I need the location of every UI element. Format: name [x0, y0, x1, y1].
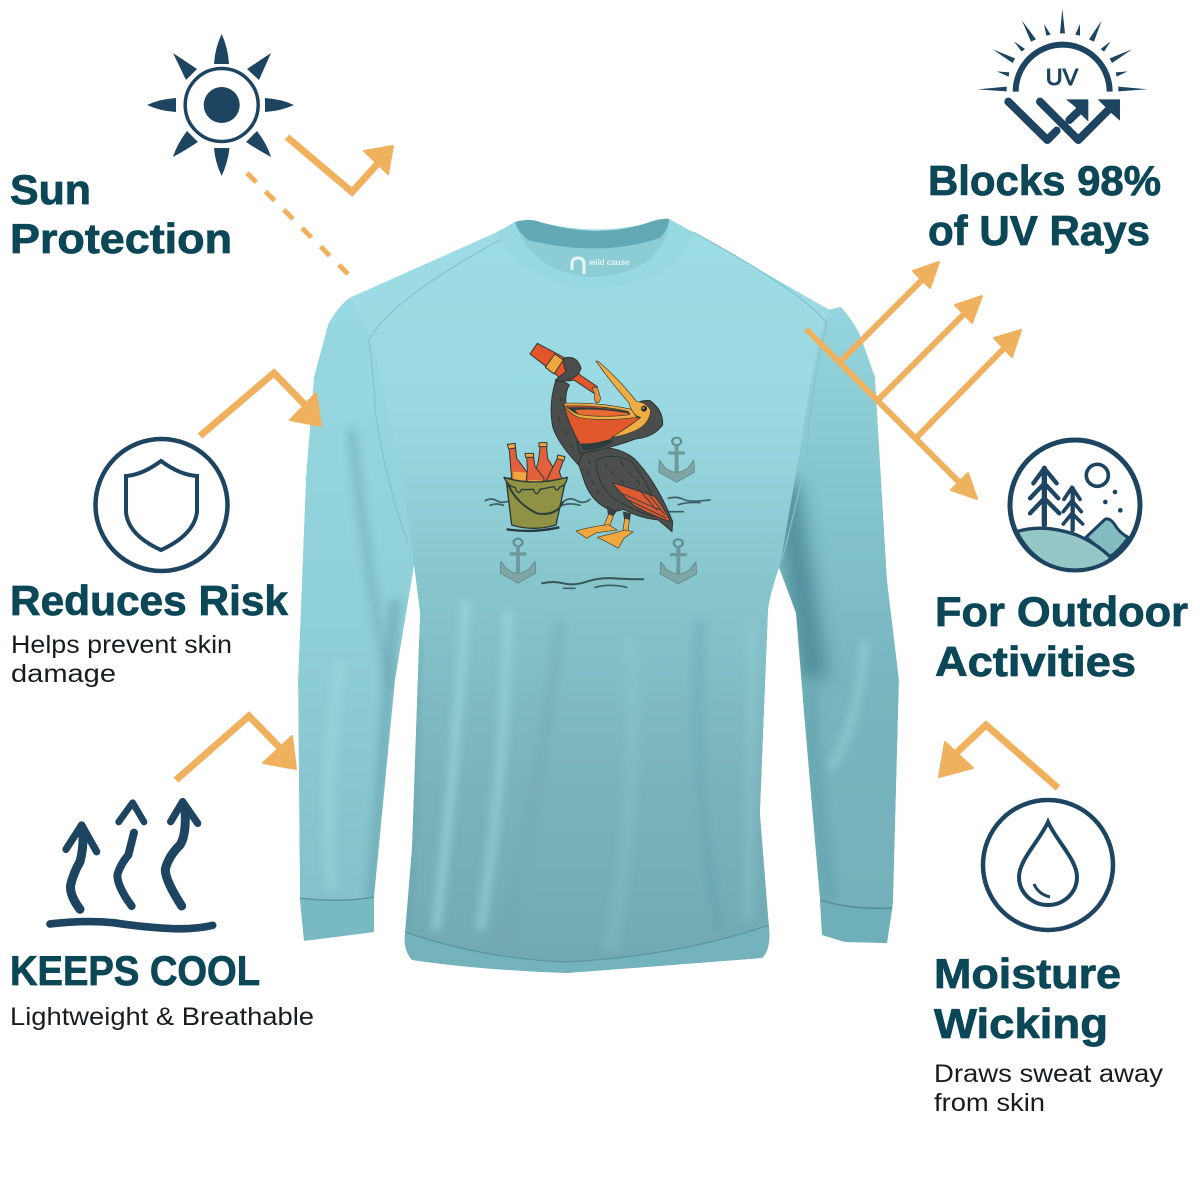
- bill: [563, 403, 637, 419]
- arrow: dashed sun ray: [247, 173, 349, 275]
- collar: [497, 219, 693, 289]
- heading: sun protection: Sun: [10, 166, 91, 213]
- shirt body: [349, 219, 830, 975]
- ice bucket: [504, 443, 567, 531]
- heading: sun protection: [10, 166, 232, 262]
- trees: [1030, 468, 1083, 530]
- text: skin damage: damage: [11, 660, 116, 688]
- heading: moisture wicking: Wicking: [934, 1000, 1108, 1047]
- arrow: sun reflection: [287, 137, 393, 192]
- arrow: reduces risk: [200, 373, 321, 436]
- neck label: wild cause: [588, 258, 630, 267]
- text: draws sweat: Draws sweat away: [934, 1060, 1164, 1088]
- anchors: [659, 438, 694, 482]
- seams: [369, 232, 827, 560]
- pouch: [563, 403, 639, 444]
- right cuff: [820, 899, 892, 943]
- text: draws sweat: [934, 1060, 1164, 1117]
- arrow: moisture: [939, 725, 1058, 788]
- heading: outdoor: For Outdoor: [935, 588, 1188, 635]
- orange wing feathers: [613, 483, 671, 522]
- sun icon: [147, 34, 294, 176]
- arrows: reflected rays: [806, 262, 1021, 499]
- uv label: UV: [1046, 64, 1079, 90]
- uv icon: [978, 9, 1147, 140]
- heading: outdoor: [935, 588, 1188, 685]
- arrow: keeps cool: [176, 716, 296, 780]
- pelican print: [485, 343, 710, 588]
- text: skin damage: Helps prevent skin: [11, 631, 232, 659]
- left sleeve: [296, 298, 420, 941]
- right sleeve: [770, 307, 899, 946]
- waves: [485, 497, 710, 588]
- heading: moisture wicking: [934, 950, 1121, 1047]
- outdoor icon: [1010, 440, 1140, 570]
- neck and head: [577, 401, 663, 453]
- text: draws sweat: from skin: [934, 1089, 1045, 1117]
- pelican body: [578, 447, 673, 532]
- heading: reduces risk: Reduces Risk: [10, 577, 289, 624]
- shield icon: [96, 439, 228, 571]
- pelican hand: [555, 357, 581, 381]
- heading: blocks uv: [928, 157, 1161, 254]
- text: skin damage: [11, 631, 232, 688]
- bottles in bucket: [507, 443, 565, 487]
- neck label: [572, 258, 630, 274]
- left cuff: [300, 899, 374, 940]
- heading: moisture wicking: Moisture: [934, 950, 1121, 997]
- shirt: [296, 219, 899, 975]
- heading: blocks uv: of UV Rays: [928, 207, 1150, 254]
- hem: [404, 926, 770, 973]
- heading: blocks uv: Blocks 98%: [928, 157, 1161, 204]
- pelican neck and arm: [551, 380, 585, 470]
- heat waves icon: [50, 802, 213, 929]
- heading: sun protection: Protection: [10, 215, 232, 262]
- eye: [641, 406, 647, 412]
- heading: outdoor: Activities: [935, 638, 1136, 685]
- legs and feet: [607, 507, 631, 521]
- text: lightweight: Lightweight & Breathable: [10, 1003, 314, 1031]
- bottle: [530, 343, 601, 403]
- heading: keeps cool: KEEPS COOL: [10, 947, 260, 994]
- droplet icon: [983, 800, 1113, 930]
